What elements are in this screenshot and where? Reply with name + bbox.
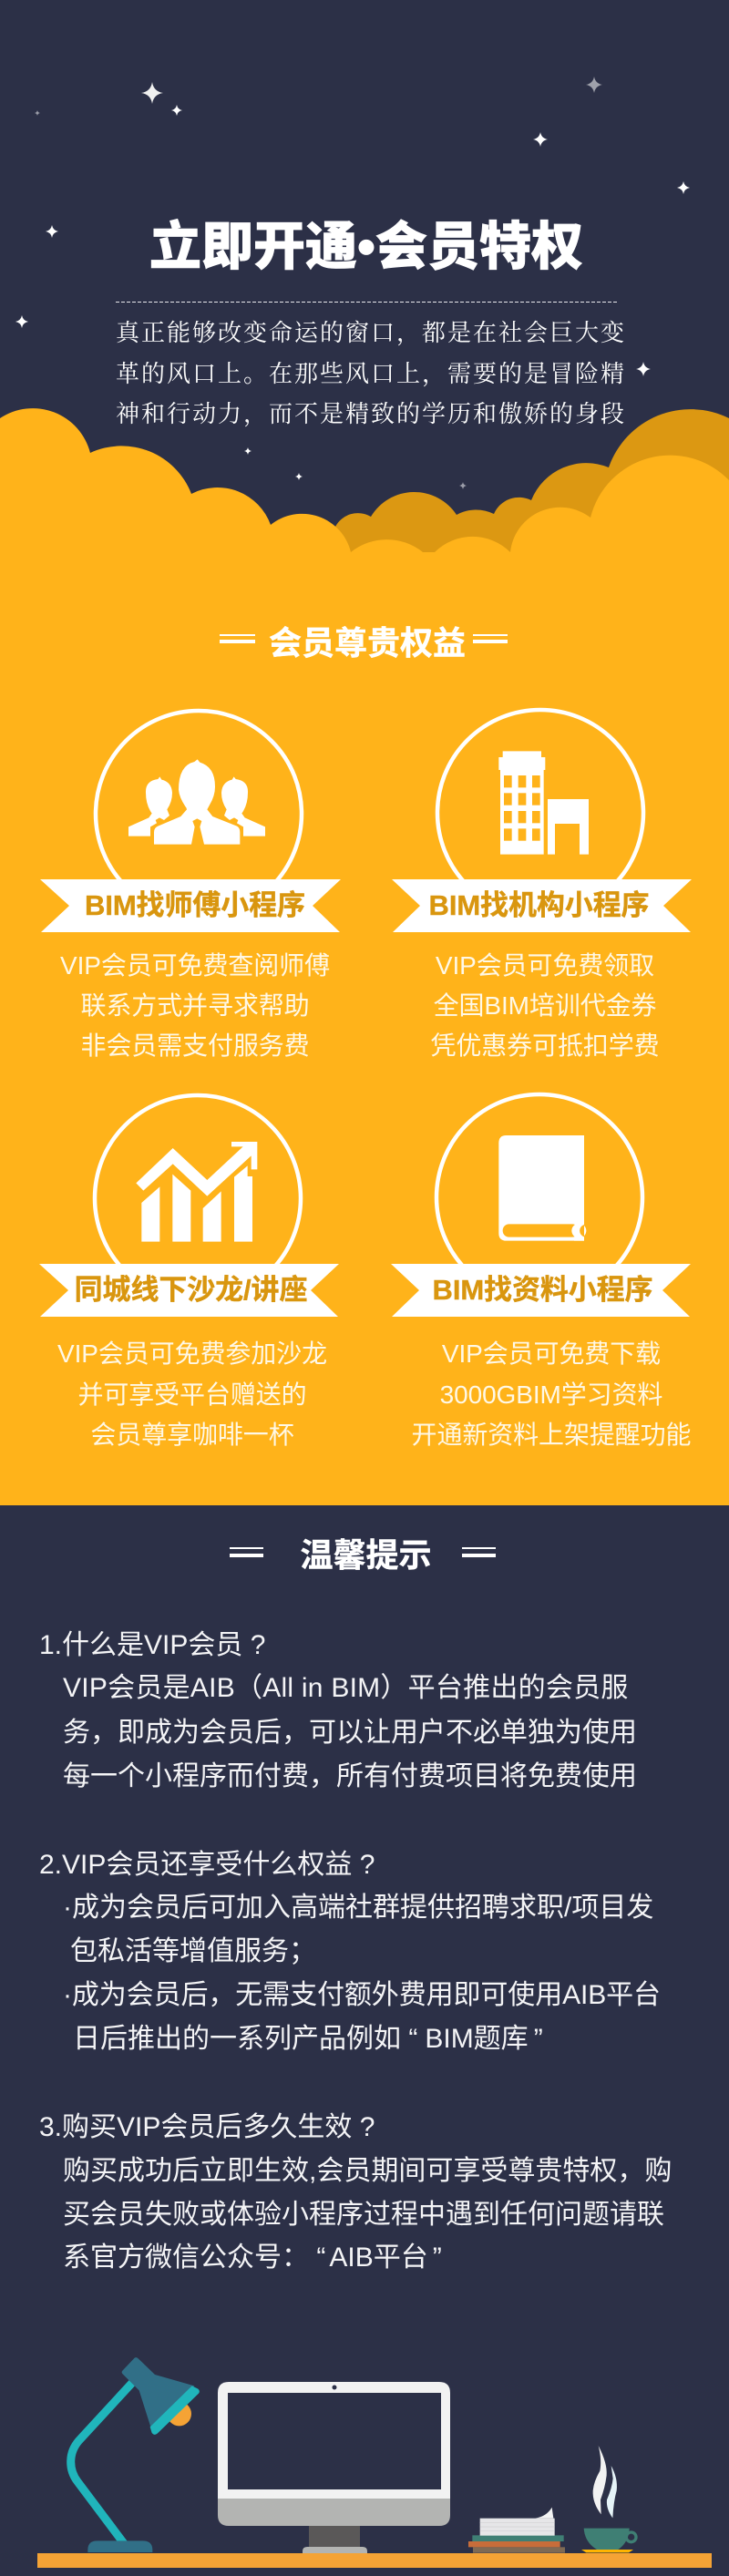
benefit text 2: 凭优惠券可抵扣学费 [430,1031,660,1060]
icon: rising chart [136,1142,257,1242]
intro text: 革的风口上。在那些风口上，需要的是冒险精 [116,361,626,387]
badge 4: resources [391,1094,691,1317]
benefit text 1: 非会员需支付服务费 [80,1031,310,1060]
benefit text 3: 会员尊享咖啡一杯 [90,1421,294,1449]
ribbon label 3: 同城线下沙龙/讲座 [75,1274,307,1306]
ribbon 2 [392,879,692,932]
badge 1: masters [40,711,341,932]
intro text [116,320,626,427]
desk [37,2553,712,2568]
FAQ 3: 3.购买VIP会员后多久生效 ? [39,2112,375,2142]
icon: book [498,1135,586,1241]
illustration: desk scene [37,2357,712,2568]
intro text: 真正能够改变命运的窗口，都是在社会巨大变 [116,320,626,346]
icon: people [128,759,265,845]
FAQ 2: ·成为会员后可加入高端社群提供招聘求职/项目发 [63,1893,653,1923]
books and paper [468,2508,565,2553]
benefit text 3: 并可享受平台赠送的 [77,1380,307,1409]
benefit text 3 [57,1339,327,1449]
badge 2: institutions [392,710,692,932]
lamp [71,2357,200,2552]
benefit text 4: VIP会员可免费下载 [442,1339,661,1368]
FAQ 3: 系官方微信公众号： “AIB平台” [63,2242,442,2273]
front clouds [0,408,729,565]
FAQ 1: 每一个小程序而付费，所有付费项目将免费使用 [63,1761,637,1791]
monitor [218,2382,450,2553]
FAQ 1: VIP会员是AIB（All in BIM）平台推出的会员服 [63,1673,629,1703]
icon: building [498,751,589,855]
FAQ 3: 购买成功后立即生效,会员期间可享受尊贵特权，购 [63,2156,672,2186]
benefit text 1: VIP会员可免费查阅师傅 [60,951,330,980]
FAQ 2: 2.VIP会员还享受什么权益 ? [39,1850,375,1880]
FAQ 3 [39,2112,672,2273]
ribbon label 2: BIM找机构小程序 [429,889,649,921]
benefit text 4: 开通新资料上架提醒功能 [412,1421,691,1449]
benefit text 1 [60,951,330,1060]
ribbon label 4: BIM找资料小程序 [433,1274,652,1306]
benefit text 1: 联系方式并寻求帮助 [80,991,310,1020]
benefit text 2: VIP会员可免费领取 [436,951,654,980]
FAQ 1: 1.什么是VIP会员 ? [39,1630,265,1660]
FAQ 1 [39,1630,637,1791]
ribbon label 1: BIM找师傅小程序 [85,889,305,921]
section heading rules: benefits [220,634,508,643]
FAQ 2: ·成为会员后，无需支付额外费用即可使用AIB平台 [63,1980,661,2010]
FAQ 1: 务，即成为会员后，可以让用户不必单独为使用 [63,1718,637,1748]
badge 3: offline salon [39,1095,339,1317]
dashed divider [116,301,618,303]
heading: member benefits: 会员尊贵权益 [269,624,466,662]
yellow section background [0,547,729,1505]
benefit text 4 [412,1339,691,1449]
title: 立即开通•会员特权 [149,218,583,276]
benefit text 2: 全国BIM培训代金券 [434,991,656,1020]
FAQ 2: 日后推出的一系列产品例如 “ BIM题库” [73,2024,543,2054]
benefit text 4: 3000GBIM学习资料 [440,1380,662,1409]
FAQ 2: 包私活等增值服务； [70,1936,316,1966]
FAQ 2 [39,1850,661,2054]
coffee cup [581,2446,636,2552]
benefit text 3: VIP会员可免费参加沙龙 [57,1339,327,1368]
stars [15,77,690,489]
heading: tips: 温馨提示 [300,1536,432,1574]
section heading rules: tips [230,1547,496,1557]
intro text: 神和行动力，而不是精致的学历和傲娇的身段 [116,401,626,427]
ribbon 3 [39,1264,339,1317]
back clouds [335,409,729,556]
FAQ 3: 买会员失败或体验小程序过程中遇到任何问题请联 [63,2200,664,2230]
ribbon 4 [391,1264,691,1317]
benefit text 2 [430,951,660,1060]
ribbon 1 [40,879,341,932]
